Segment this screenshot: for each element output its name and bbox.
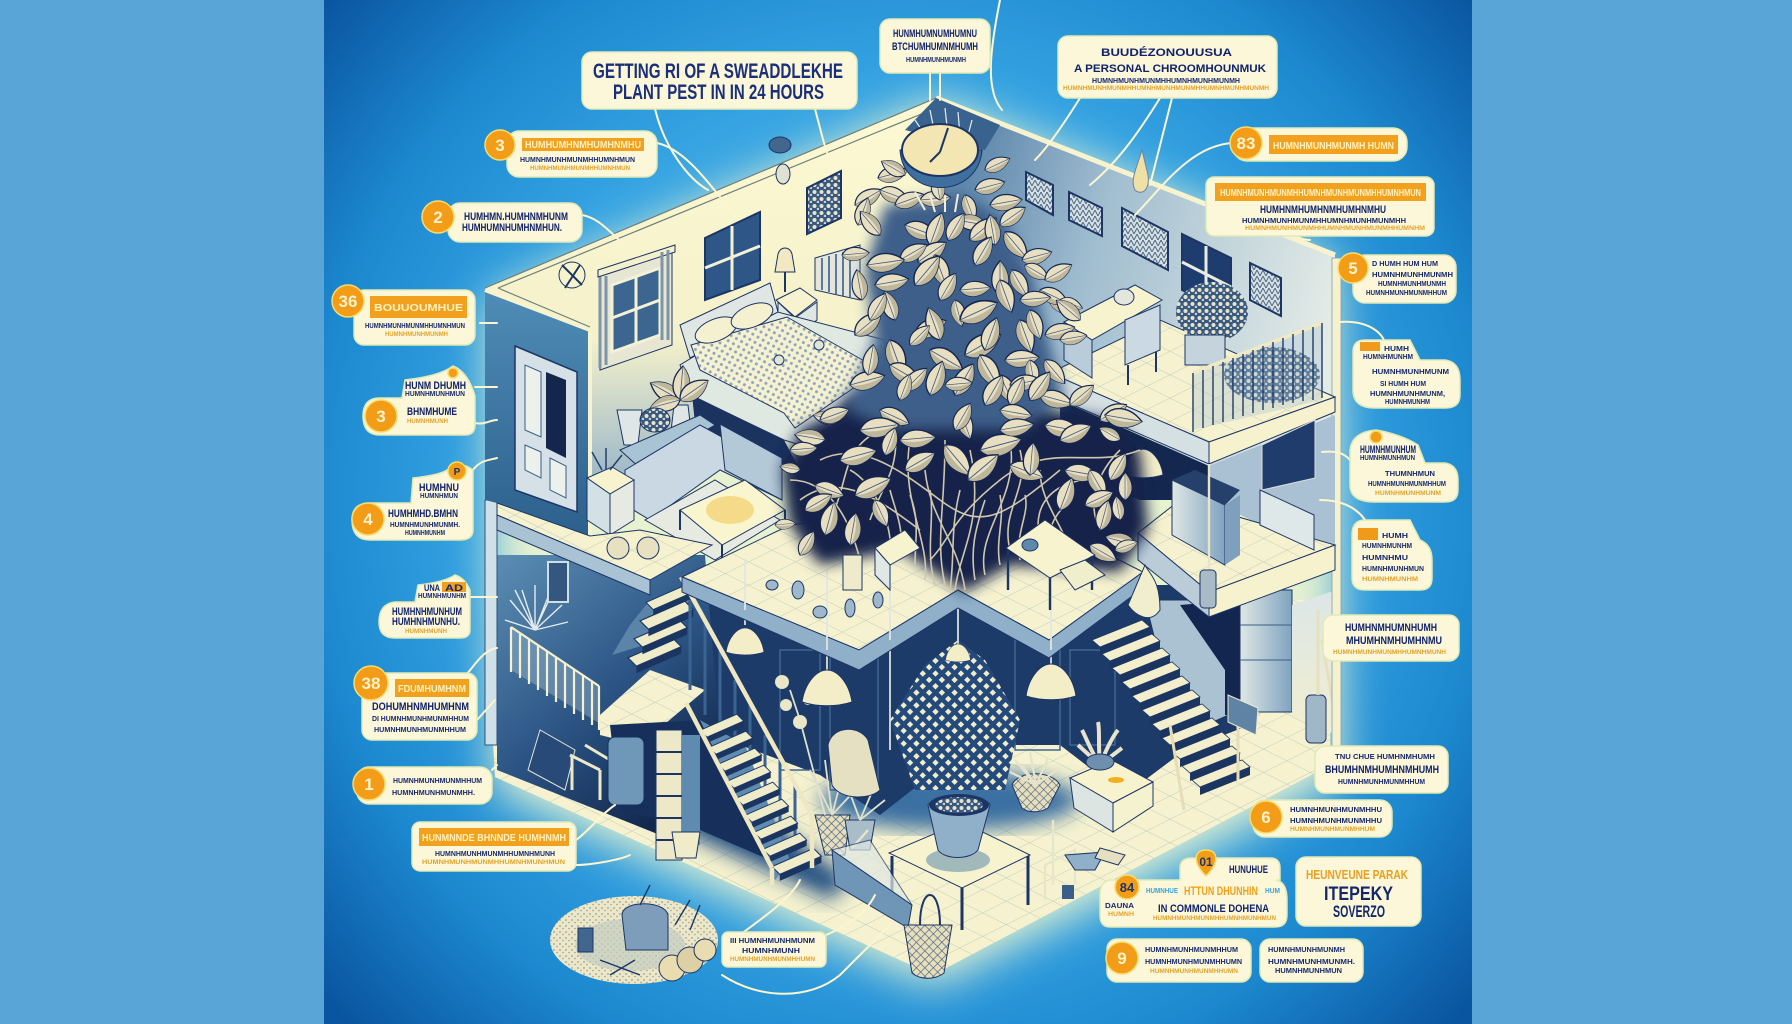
second window bbox=[705, 212, 760, 300]
small wall clock bbox=[769, 137, 791, 153]
callout right A: SI HUMH HUM bbox=[1380, 381, 1426, 388]
callout T bbox=[1315, 746, 1448, 793]
callout 1: HUMNHMUNHMUNMHHUM bbox=[393, 778, 482, 785]
dining set right bbox=[1006, 520, 1105, 610]
callout 1: 1 bbox=[364, 775, 374, 794]
callout with tag: UNA bbox=[424, 583, 440, 593]
callout with tag: HUMHNHMUNHUM bbox=[392, 606, 462, 618]
right staircase bbox=[1092, 620, 1260, 810]
callout S: MHUMHNMHUMHNMU bbox=[1346, 635, 1442, 647]
plant on ottoman bbox=[1078, 722, 1122, 770]
ground floor tiles bbox=[485, 600, 1330, 975]
callout right B: THUMNHMUN bbox=[1385, 471, 1435, 478]
callout 3: HUMNHMUNHMUNMHHUMNHMUN bbox=[530, 166, 630, 172]
lower left room bbox=[497, 555, 725, 835]
stair balusters bbox=[690, 600, 795, 865]
kitchen window bbox=[1262, 420, 1315, 490]
vacuum bbox=[828, 729, 880, 797]
drip ornament bbox=[1133, 150, 1148, 192]
cream glow behind the house bbox=[490, 100, 1340, 985]
callout orange banner lower left bbox=[412, 822, 576, 871]
plant leaves bbox=[775, 153, 1143, 567]
callout double centre bottom: 84 bbox=[1120, 880, 1135, 895]
callout with tag: HUMHNHMUNHU. bbox=[392, 616, 460, 628]
callout orange banner lower left: HUMNHMUNHMUNMHHUMNHMUNH bbox=[435, 851, 555, 858]
callout 9: 9 bbox=[1117, 949, 1127, 968]
bucket bbox=[672, 832, 700, 858]
couch floor slab bbox=[497, 503, 712, 595]
callout wide banner: HUMNHMUNHMUNMHHUMNHMUNHMUNMHHUMNHMUN bbox=[1220, 188, 1421, 199]
left cream wall bbox=[485, 98, 936, 500]
door bbox=[515, 346, 577, 512]
balcony post and canister bbox=[1200, 464, 1216, 608]
callout 1: HUMNHMUNHMUNMHH. bbox=[392, 790, 475, 797]
callout by debris pile: III HUMNHMUNHMUNM bbox=[730, 938, 815, 945]
callout 9: HUMNHMUNHMUNMHHUM bbox=[1145, 947, 1238, 954]
callout 3: 3 bbox=[495, 136, 505, 155]
callout double centre bottom bbox=[1100, 850, 1287, 927]
callout right B bbox=[1350, 430, 1458, 502]
hanging lamp cords bbox=[745, 560, 1051, 650]
callout: header top right: A PERSONAL CHROOMHOUNMUK bbox=[1074, 63, 1266, 75]
shelf pots bbox=[617, 408, 670, 445]
callout 5: HUMNHMUNHMUNMH bbox=[1378, 281, 1446, 288]
table with big pot bbox=[889, 794, 1030, 930]
callout right C: HUMNHMUNHM bbox=[1362, 543, 1412, 550]
callout double A: HUMNHMUNH bbox=[407, 419, 448, 425]
callout wide banner: HUMHNMHUMHNMHUMHNMHU bbox=[1260, 204, 1386, 216]
picture lower left bbox=[548, 562, 568, 602]
callout by debris pile: HUMNHMUNH bbox=[742, 948, 800, 955]
callout double B: HUMNHMUN bbox=[420, 493, 458, 500]
callout 36: BOUUOUMHUE bbox=[374, 303, 463, 314]
callout double centre bottom: HUMNH bbox=[1108, 912, 1134, 918]
landing tiles lower left bbox=[600, 670, 705, 745]
callout S: HUMNHMUNHMUNMHHUMNHMUNH bbox=[1333, 650, 1446, 656]
callout 36: HUMNHMUNHMUNMHHUMNHMUN bbox=[365, 323, 465, 330]
callout right A bbox=[1353, 340, 1460, 408]
picture bbox=[807, 171, 841, 234]
headboard bbox=[680, 283, 778, 358]
left blue wall bbox=[485, 290, 590, 540]
callout double A bbox=[363, 366, 475, 435]
callout right A: HUMNHMUNHMUNM, bbox=[1370, 391, 1445, 398]
callout right A: HUMNHMUNHMUNM bbox=[1372, 369, 1449, 376]
callout double centre bottom: DAUNA bbox=[1105, 903, 1134, 910]
callout 83: HUMNHMUNHMUNMH HUMN bbox=[1273, 141, 1394, 152]
ottoman bbox=[1070, 760, 1153, 832]
callout double centre bottom: HTTUN DHUNHIN bbox=[1184, 884, 1258, 898]
under-stair dark bbox=[610, 720, 770, 860]
callout 36: 36 bbox=[339, 292, 357, 311]
callout 6: 6 bbox=[1261, 808, 1271, 827]
callout wide banner: HUMNHMUNHMUNMHHUMNHMUNHMUNMHH bbox=[1242, 218, 1406, 225]
wall trim lines bbox=[485, 98, 936, 327]
callout right A: HUMNHMUNHM bbox=[1385, 399, 1430, 406]
callout with tag: HUMNHMUNHM bbox=[418, 593, 466, 600]
stool bbox=[570, 745, 610, 800]
callout right C: HUMNHMUNHM bbox=[1362, 577, 1418, 583]
callout T: BHUMHNMHUMHNMHUMH bbox=[1325, 764, 1439, 776]
dark under stair bbox=[1180, 600, 1240, 715]
callout highlight panel bbox=[1296, 857, 1421, 926]
callout right C bbox=[1352, 520, 1432, 590]
callout 6: HUMNHMUNHMUNMHHUM bbox=[1290, 827, 1375, 833]
kitchen cabinets bbox=[1172, 470, 1314, 565]
flowering shrub bbox=[1176, 282, 1248, 365]
kitchen slab bbox=[1138, 500, 1335, 617]
wall ornament bbox=[559, 262, 585, 288]
callout 5 bbox=[1338, 253, 1456, 303]
callout double centre bottom: HUMNHMUNHMUNMHHUMNHMUNHMUN bbox=[1153, 916, 1276, 922]
balcony slab bbox=[1050, 320, 1335, 464]
callout right C: HUMNHMU bbox=[1362, 555, 1408, 562]
callout double B: P bbox=[454, 467, 461, 478]
callout with tag: AD bbox=[445, 583, 464, 593]
lower centre room walls bbox=[690, 585, 1250, 815]
callout: top clock note: HUNMHUMNUMHUMNU bbox=[893, 28, 977, 40]
floor clutter bbox=[766, 580, 883, 618]
table lamp and nightstand bbox=[775, 248, 817, 336]
callout with tag bbox=[379, 575, 470, 638]
callout T: TNU CHUE HUMHNMHUMH bbox=[1335, 754, 1435, 761]
callout double B: HUMNHMUNHMUNMH. bbox=[390, 522, 460, 529]
callout T: HUMNHMUNHMUNMHHUM bbox=[1338, 779, 1425, 786]
round wall plate bbox=[776, 164, 790, 184]
callout 83: 83 bbox=[1237, 134, 1255, 153]
callout 5: D HUMH HUM HUM bbox=[1372, 261, 1438, 268]
plant lower dark tangle bbox=[782, 385, 1148, 592]
basket bbox=[904, 895, 952, 978]
wall clock bowl bbox=[900, 124, 982, 212]
mid floor slab bbox=[682, 500, 1143, 670]
callout: header top right bbox=[1058, 36, 1277, 98]
callout bottom right: HUMNHMUNHMUNMH. bbox=[1268, 959, 1355, 966]
callout: header top right: HUMNHMUNHMUNMHHUMNHMUNHMUNMH bbox=[1092, 78, 1240, 85]
callout double B: HUMNHMUNHM bbox=[405, 530, 445, 537]
callout highlight panel: SOVERZO bbox=[1333, 902, 1385, 921]
callout by debris pile bbox=[722, 932, 826, 967]
callout 3: HUMHUMHNMHUMHNMHU bbox=[525, 140, 641, 151]
callout double B bbox=[352, 462, 473, 540]
scattered items bbox=[1062, 848, 1125, 899]
shelf ledge bbox=[620, 415, 715, 468]
callout 9 bbox=[1106, 939, 1251, 982]
floor shadow lower left bbox=[620, 770, 850, 900]
callout 9: HUMNHMUNHMUNMHHUMN bbox=[1145, 959, 1242, 966]
bedspread bbox=[691, 317, 880, 428]
callout 38: FDUMHUMHNM bbox=[398, 684, 466, 695]
callout 2: HUMHMN.HUMHNMHUNM bbox=[464, 211, 568, 223]
stair rails bbox=[681, 577, 812, 885]
callout 36 bbox=[332, 285, 475, 345]
callout orange banner lower left: HUNMNNDE BHNNDE HUMHNMH bbox=[422, 833, 566, 844]
bedroom slab bbox=[680, 310, 885, 445]
callout right B: HUMNHMUNHMUNMHHUM bbox=[1368, 481, 1446, 488]
barrel bbox=[608, 737, 644, 805]
callout right A: HUMNHMUNHM bbox=[1363, 354, 1413, 361]
callout 83 bbox=[1230, 127, 1407, 161]
title bbox=[582, 52, 857, 109]
right pillar bbox=[1332, 258, 1341, 768]
falling pest dots bbox=[890, 640, 1020, 790]
callout: header top right: HUMNHMUNHMUNMHHUMNHMUNHMUNMHHUMNHMUNHMUNMH bbox=[1063, 86, 1269, 92]
fern bbox=[505, 585, 568, 630]
callout 36: HUMNHMUNHMUNMH bbox=[385, 332, 448, 338]
callout 38: DOHUMHNMHUMHNM bbox=[372, 701, 469, 713]
callout double A: HUMNHMUNHMUN bbox=[405, 391, 465, 398]
pillar next to shelf bbox=[682, 735, 700, 845]
right wall bbox=[936, 98, 1335, 560]
callout double A: BHNMHUME bbox=[407, 406, 457, 418]
callout double B: HUMHMHD.BMHN bbox=[388, 508, 458, 520]
cabinet bbox=[587, 448, 634, 535]
callout 5: HUMNHMUNHMUNMHHUM bbox=[1366, 290, 1447, 297]
plant roots and vines bbox=[790, 430, 1140, 590]
potted plants by stairs bbox=[775, 675, 885, 855]
callout double A: 3 bbox=[376, 407, 386, 426]
callout: top clock note bbox=[880, 19, 990, 73]
callout 6 bbox=[1250, 800, 1392, 837]
callout right B: HUMNHMUNHMUN bbox=[1360, 455, 1415, 462]
callout with tag: HUMNHMUNH bbox=[405, 629, 447, 635]
callout by debris pile: HUMNHMUNHMUNMHHUMN bbox=[730, 957, 815, 963]
kitchen back wall bbox=[1209, 415, 1335, 560]
floor basket plant bbox=[1010, 752, 1060, 812]
plant upper backing bbox=[845, 195, 1065, 430]
callout 38 bbox=[354, 666, 477, 740]
main staircase bbox=[700, 714, 821, 881]
callout right B: HUMNHMUNHUM bbox=[1360, 444, 1416, 456]
callout 2: HUMHUMNHUMHNMHUN. bbox=[462, 222, 562, 234]
potted palm bbox=[646, 365, 713, 440]
shelf ladder bbox=[656, 730, 682, 860]
desk with chair bbox=[1064, 285, 1162, 385]
callout bottom right: HUMNHMUNHMUN bbox=[1275, 968, 1342, 975]
apex shade bbox=[905, 98, 1000, 150]
lower railing bbox=[511, 627, 599, 730]
callout double centre bottom: HUMNHUE bbox=[1146, 888, 1178, 895]
radiator bbox=[815, 245, 860, 300]
right pendant lamp bbox=[1123, 449, 1163, 478]
callout 1 bbox=[353, 767, 492, 804]
callout orange banner lower left: HUMNHMUNHMUNMHHUMNHMUNHMUN bbox=[422, 860, 565, 866]
callout highlight panel: ITEPEKY bbox=[1324, 884, 1393, 905]
callout 6: HUMNHMUNHMUNMHHU bbox=[1290, 818, 1382, 825]
callout S: HUMHNMHUMNHUMH bbox=[1345, 622, 1437, 634]
dark under balcony bbox=[1060, 400, 1209, 500]
callout double B: HUMHNU bbox=[419, 482, 459, 494]
callout 38: 38 bbox=[362, 674, 380, 693]
callout 38: DI HUMNHMUNHMUNMHHUM bbox=[372, 716, 469, 723]
callout bottom right: HUMNHMUNHMUNMH bbox=[1268, 947, 1345, 954]
pictures on right wall bbox=[1026, 172, 1281, 316]
connector lines bbox=[460, 0, 1385, 994]
upper short stairs bbox=[612, 586, 693, 673]
callout: top clock note: BTCHUMHUMNMHUMH bbox=[892, 41, 978, 53]
callout 2 bbox=[422, 201, 582, 242]
callout double centre bottom: IN COMMONLE DOHENA bbox=[1158, 903, 1269, 915]
callout 5: 5 bbox=[1348, 259, 1358, 278]
storage crate bbox=[528, 730, 575, 790]
callout double A: HUNM DHUMH bbox=[405, 380, 466, 392]
coffee table bbox=[680, 480, 785, 575]
callout: header top right: BUUDÉZONOUUSUA bbox=[1101, 46, 1232, 59]
callout wide banner: HUMNHMUNHMUNMHHUMNHMUNHMUNMHHUMNHM bbox=[1245, 226, 1425, 232]
callout right A: HUMH bbox=[1384, 346, 1409, 353]
door panels bbox=[780, 640, 1115, 790]
callout highlight panel: HEUNVEUNE PARAK bbox=[1306, 867, 1408, 882]
hanging bag bbox=[1128, 565, 1160, 618]
callout double centre bottom: HUM bbox=[1265, 888, 1280, 895]
callout 38: HUMNHMUNHMUNMHHUM bbox=[374, 727, 466, 734]
dining set left bbox=[843, 530, 920, 590]
callout 3 bbox=[485, 130, 657, 177]
chairs by table bbox=[852, 820, 1075, 900]
left pillar bbox=[485, 500, 497, 745]
sofa block lower bbox=[832, 850, 912, 928]
callout bottom right bbox=[1260, 939, 1363, 982]
window with curtains bbox=[598, 245, 675, 370]
window right wall bbox=[1182, 234, 1231, 315]
cylinder and broom bbox=[1306, 610, 1340, 745]
callout 2: 2 bbox=[433, 208, 443, 227]
garage door bbox=[1240, 590, 1292, 712]
dark under bedroom bbox=[692, 395, 800, 470]
bed pests bbox=[774, 340, 824, 365]
sofa bbox=[625, 424, 782, 560]
pendant lamps bbox=[726, 590, 1076, 750]
callout S bbox=[1323, 615, 1459, 661]
balcony bush and railing bbox=[1193, 323, 1322, 432]
callout wide banner bbox=[1206, 177, 1434, 236]
callout 9: HUMNHMUNHMUNMHHUMN bbox=[1150, 969, 1238, 975]
wall behind right stairs bbox=[1145, 600, 1240, 740]
callout: top clock note: HUMNHMUNHMUNMH bbox=[906, 57, 966, 64]
pillows bbox=[691, 298, 777, 348]
crate by stairs bbox=[1228, 695, 1258, 735]
callout right B: HUMNHMUNHMUNM bbox=[1375, 491, 1441, 497]
light wall beside door bbox=[1292, 590, 1336, 735]
callout right C: HUMH bbox=[1382, 533, 1408, 540]
callout 6: HUMNHMUNHMUNMHHU bbox=[1290, 807, 1382, 814]
debris pile bbox=[550, 885, 718, 984]
callout double centre bottom: HUNUHUE bbox=[1229, 864, 1268, 876]
title: GETTING RI OF A SWEADDLEKHE bbox=[593, 60, 843, 83]
illustration: cutaway house bbox=[485, 98, 1341, 984]
floor shadow bbox=[820, 770, 1080, 830]
callout right C: HUMNHMUNHMUN bbox=[1362, 566, 1424, 573]
panel background bbox=[324, 0, 1472, 1024]
callout 5: HUMNHMUNHMUNMH bbox=[1372, 272, 1453, 279]
callout double centre bottom: 01 bbox=[1199, 855, 1213, 869]
callout double B: 4 bbox=[363, 510, 373, 529]
title: PLANT PEST IN IN 24 HOURS bbox=[613, 81, 824, 104]
callout 3: HUMNHMUNHMUNMHHUMNHMUN bbox=[520, 157, 635, 164]
